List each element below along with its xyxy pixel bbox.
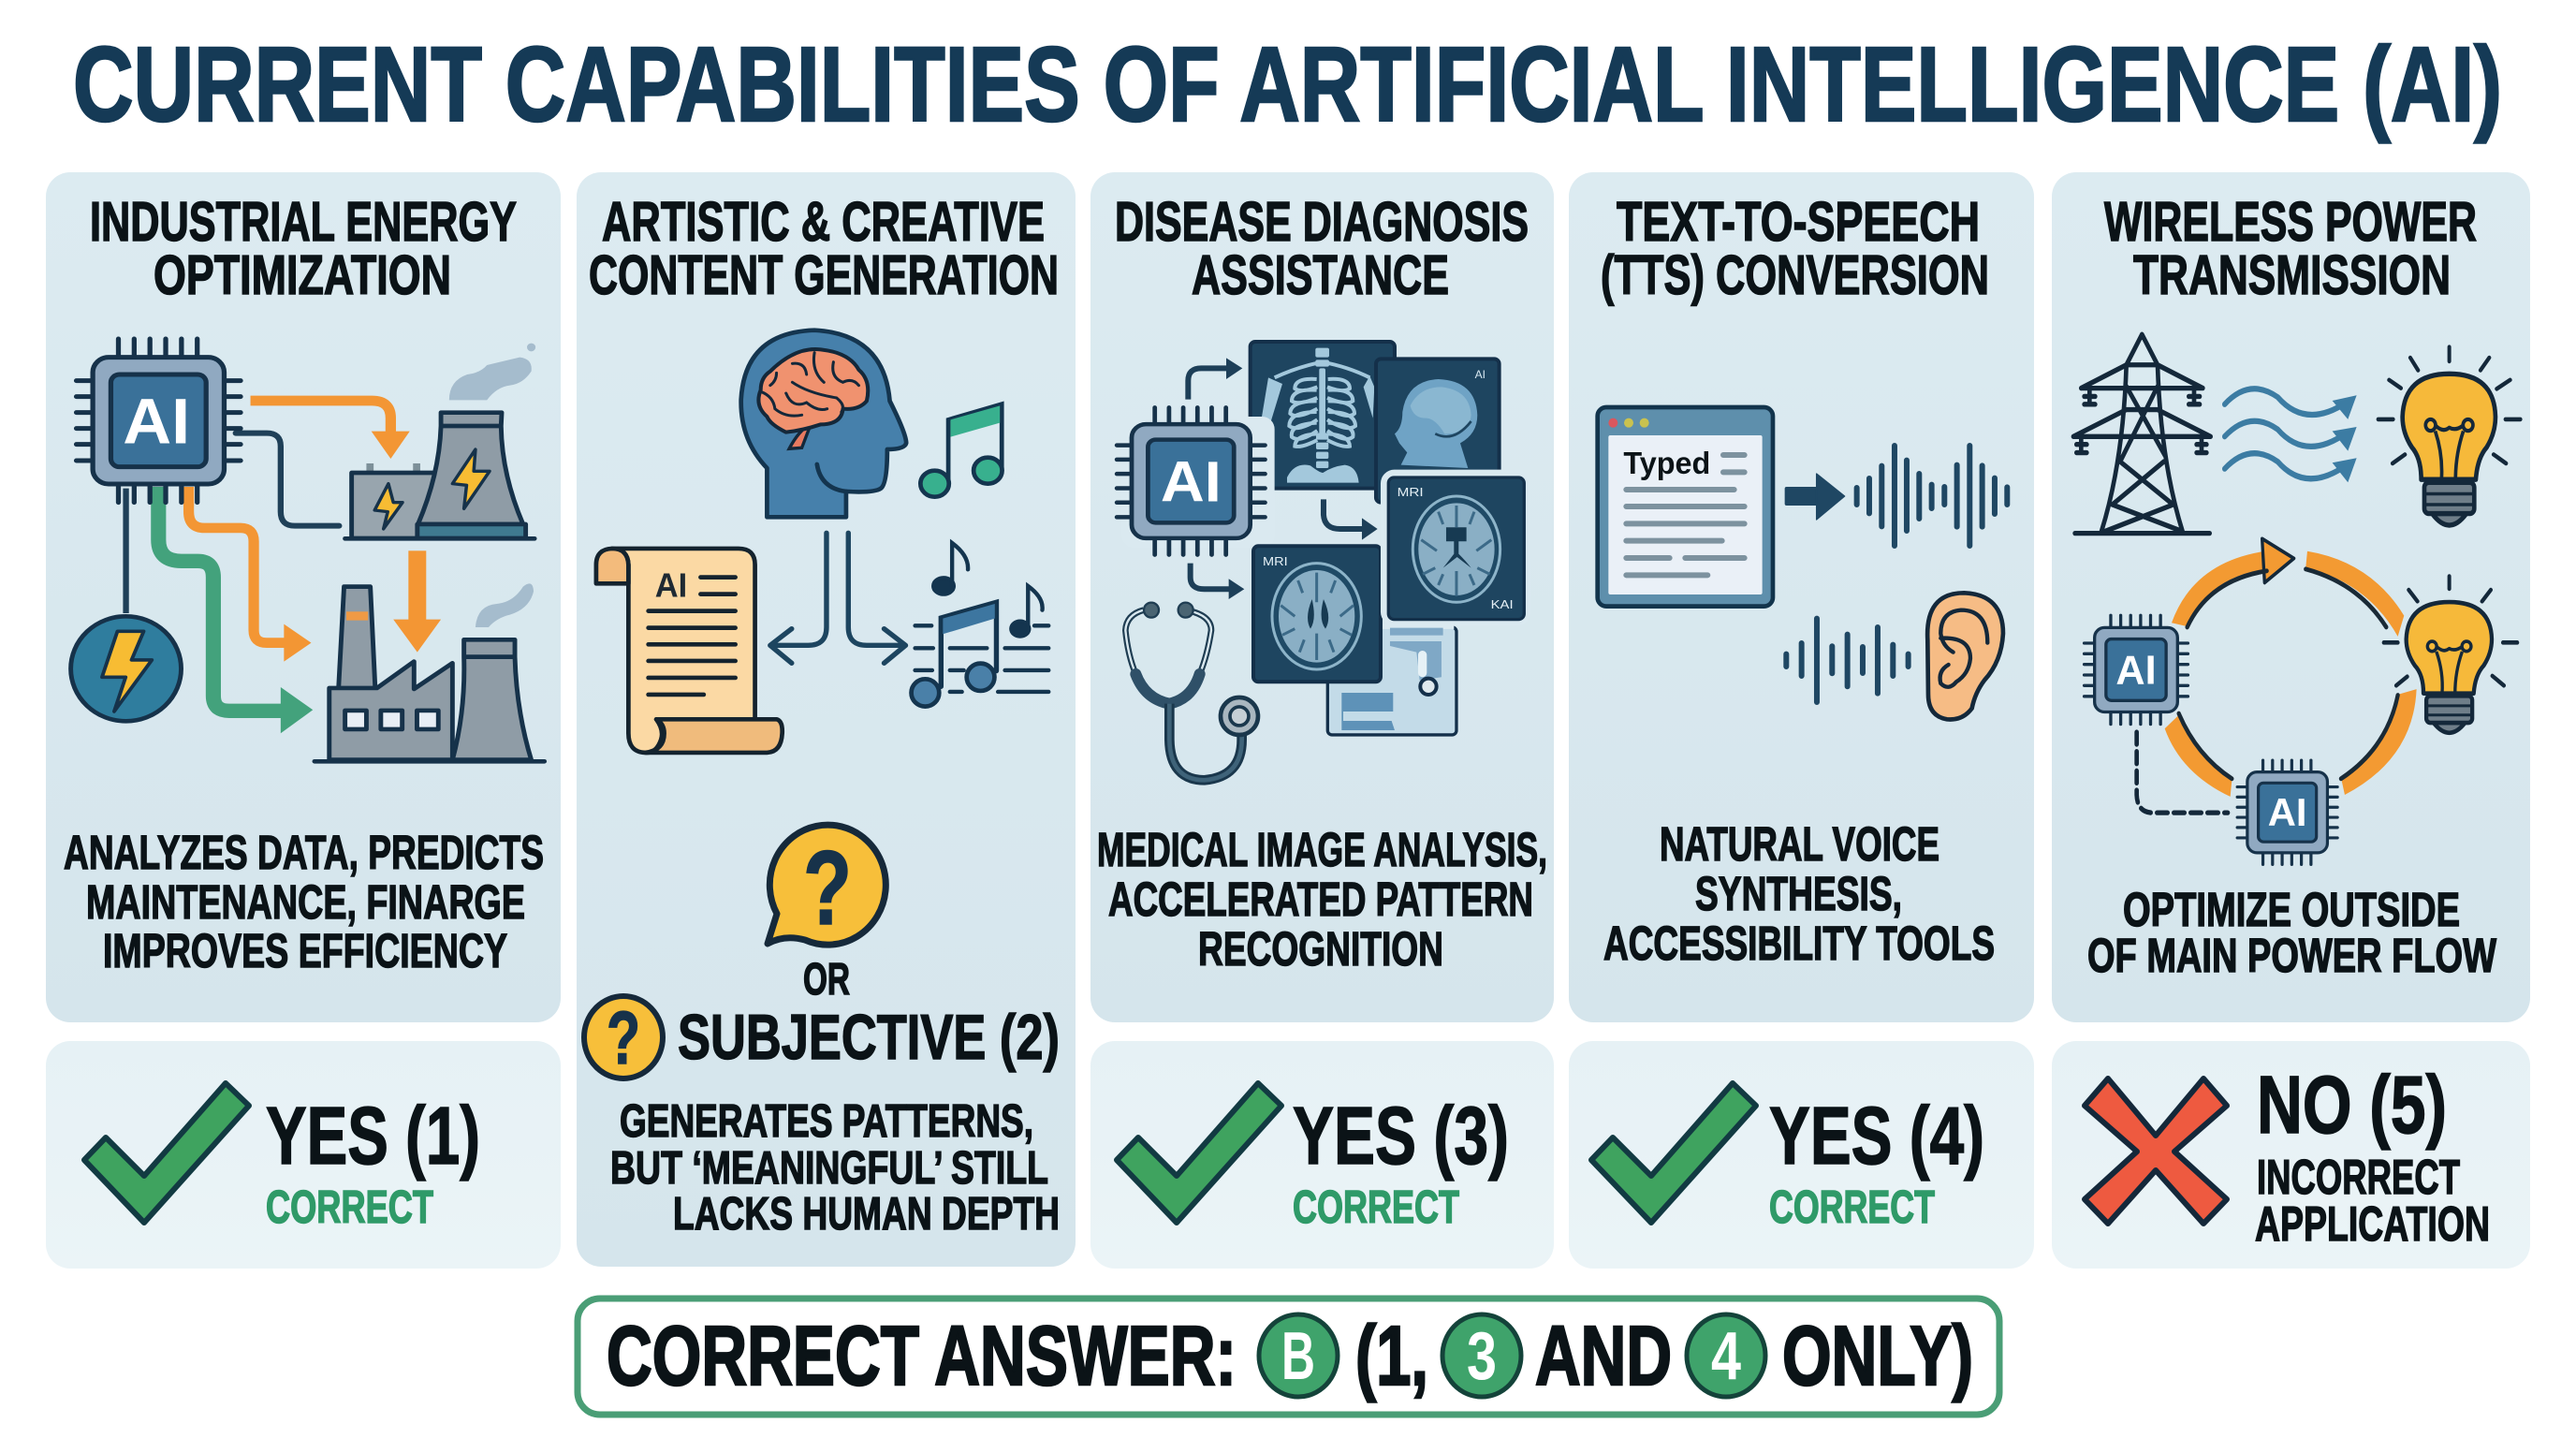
- icon: question speech bubble: ?: [803, 829, 852, 946]
- answer badge 4: [1687, 1314, 1765, 1397]
- verdict text: YES (3): [1293, 1091, 1509, 1181]
- verdict text: NO (5): [2257, 1060, 2447, 1151]
- icon: green check: [1591, 1083, 1756, 1223]
- heading: industrial energy: [90, 191, 517, 306]
- verdict card: no 5: [2052, 1041, 2530, 1269]
- correct label: CORRECT: [1293, 1182, 1459, 1233]
- verdict card: yes 3: [1090, 1041, 1554, 1269]
- icon: question circle: ?: [607, 996, 640, 1079]
- incorrect application label: [2255, 1151, 2490, 1252]
- incorrect application label: APPLICATION: [2255, 1197, 2490, 1252]
- icon: typed text to sound waves and ear: Typed: [1623, 447, 1710, 481]
- description: industrial energy: MAINTENANCE, FINARGE: [86, 875, 525, 929]
- description: industrial energy: [64, 826, 544, 977]
- icon: AI chip powering energy and factory: [71, 339, 545, 761]
- description: wireless power: OPTIMIZE OUTSIDE: [2123, 883, 2460, 936]
- answer badge 4: 4: [1711, 1319, 1741, 1394]
- heading: disease diagnosis: DISEASE DIAGNOSIS: [1115, 191, 1529, 253]
- verdict card: yes 1: [46, 1041, 561, 1269]
- icon: red cross: [2085, 1078, 2227, 1224]
- answer text: ONLY): [1782, 1310, 1973, 1403]
- heading: industrial energy: OPTIMIZATION: [154, 244, 451, 306]
- description: subjective: [610, 1096, 1060, 1240]
- description: disease diagnosis: RECOGNITION: [1198, 922, 1443, 976]
- or label: OR: [803, 955, 850, 1005]
- icon: AI chip, scans and stethoscope: AI: [1161, 450, 1222, 514]
- description: industrial energy: ANALYZES DATA, PREDICTS: [64, 826, 544, 879]
- icon: head, scroll and music: AI: [655, 566, 687, 605]
- icon: typed text to sound waves and ear: [1598, 407, 2007, 719]
- icon: AI chip powering energy and factory: AI: [123, 385, 190, 457]
- answer badge B: B: [1281, 1319, 1315, 1394]
- verdict: subjective: SUBJECTIVE (2): [678, 1002, 1060, 1073]
- icon: AI chip, scans and stethoscope: MRI: [1398, 485, 1424, 499]
- description: subjective: LACKS HUMAN DEPTH: [673, 1189, 1060, 1240]
- icon: AI chip, scans and stethoscope: [1117, 342, 1530, 780]
- heading: text-to-speech: TEXT-TO-SPEECH: [1617, 191, 1980, 253]
- heading: text-to-speech: (TTS) CONVERSION: [1601, 244, 1989, 306]
- answer badge B: [1259, 1314, 1338, 1397]
- icon: question circle: [584, 996, 663, 1079]
- icon: power tower, waves, bulbs and AI loop: [2073, 334, 2521, 864]
- icon: question speech bubble: [768, 825, 886, 946]
- description: disease diagnosis: [1097, 823, 1547, 976]
- description: industrial energy: IMPROVES EFFICIENCY: [103, 924, 507, 977]
- icon: head, scroll and music: [596, 330, 1048, 753]
- panel: artistic and creative content generation: [577, 172, 1076, 1267]
- icon: power tower, waves, bulbs and AI loop: AI: [2268, 790, 2307, 834]
- answer badge 3: [1442, 1314, 1521, 1397]
- heading: wireless power: TRANSMISSION: [2133, 244, 2451, 306]
- heading: artistic: ARTISTIC & CREATIVE: [602, 191, 1045, 253]
- description: text-to-speech: NATURAL VOICE: [1660, 817, 1939, 871]
- panel: industrial energy optimization: [46, 172, 561, 1022]
- verdict card: yes 4: [1569, 1041, 2034, 1269]
- answer text: (1,: [1355, 1310, 1428, 1403]
- description: wireless power: [2087, 883, 2497, 982]
- heading: disease diagnosis: ASSISTANCE: [1192, 244, 1449, 306]
- verdict text: YES (4): [1769, 1091, 1984, 1181]
- incorrect application label: INCORRECT: [2257, 1151, 2460, 1205]
- verdict text: YES (1): [266, 1091, 480, 1181]
- description: text-to-speech: SYNTHESIS,: [1695, 867, 1902, 920]
- answer label: CORRECT ANSWER:: [607, 1310, 1237, 1403]
- description: text-to-speech: [1603, 817, 1995, 970]
- heading: disease diagnosis: [1115, 191, 1529, 306]
- icon: green check: [84, 1083, 249, 1223]
- description: text-to-speech: ACCESSIBILITY TOOLS: [1603, 917, 1995, 970]
- panel: disease diagnosis assistance: [1090, 172, 1554, 1022]
- icon: green check: [1117, 1083, 1281, 1223]
- panel: text-to-speech conversion: [1569, 172, 2034, 1022]
- icon: AI chip, scans and stethoscope: AI: [1475, 368, 1486, 381]
- description: subjective: BUT ‘MEANINGFUL’ STILL: [610, 1143, 1048, 1194]
- answer badge 3: 3: [1467, 1319, 1497, 1394]
- heading: text-to-speech: [1601, 191, 1989, 306]
- answer text: AND: [1535, 1310, 1672, 1403]
- correct answer banner: [578, 1299, 1999, 1415]
- icon: AI chip, scans and stethoscope: MRI: [1263, 554, 1288, 568]
- heading: artistic: CONTENT GENERATION: [589, 244, 1059, 306]
- panel: wireless power transmission: [2052, 172, 2530, 1022]
- heading: wireless power: [2104, 191, 2477, 306]
- icon: AI chip, scans and stethoscope: KAI: [1491, 597, 1514, 611]
- correct label: CORRECT: [266, 1182, 433, 1233]
- description: disease diagnosis: ACCELERATED PATTERN: [1108, 873, 1533, 926]
- description: disease diagnosis: MEDICAL IMAGE ANALYSIS,: [1097, 823, 1547, 876]
- correct label: CORRECT: [1769, 1182, 1935, 1233]
- heading: industrial energy: INDUSTRIAL ENERGY: [90, 191, 517, 253]
- description: subjective: GENERATES PATTERNS,: [620, 1096, 1033, 1147]
- heading: artistic: [589, 191, 1059, 306]
- icon: power tower, waves, bulbs and AI loop: AI: [2115, 648, 2157, 694]
